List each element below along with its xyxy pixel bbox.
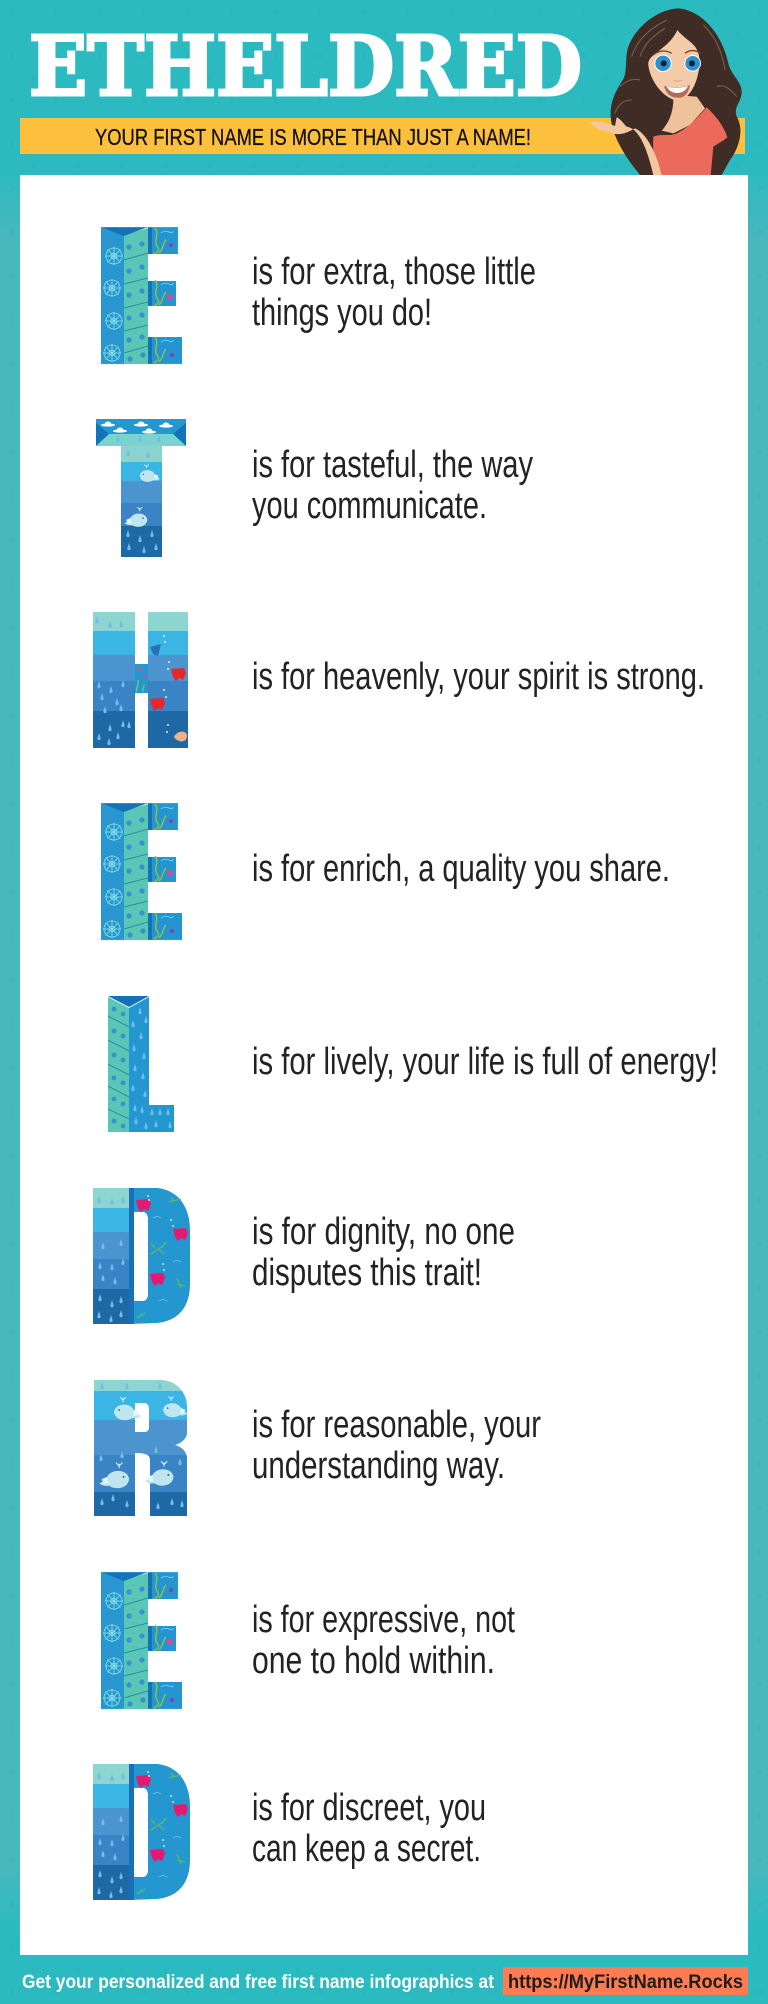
text: D meaning: can keep a secret. [252,1828,481,1870]
letter H [93,612,188,748]
text: R meaning: understanding way. [252,1445,505,1487]
footer call to action: Get your personalized and free first name infographics at [22,1972,495,1993]
text: T meaning: is for tasteful, the way [252,444,533,486]
subtitle banner: YOUR FIRST NAME IS MORE THAN JUST A NAME! [95,124,531,150]
text: D meaning [252,1211,515,1294]
text: D meaning: is for dignity, no one [252,1211,515,1253]
letter L [108,996,174,1132]
text: E meaning: things you do! [252,292,432,334]
subtitle banner [20,118,745,154]
text: E meaning: is for expressive, not [252,1599,515,1641]
text: E meaning [252,251,536,334]
letter E [101,803,182,940]
illustration: woman presenting [590,8,742,175]
text: E meaning: is for extra, those little [252,251,536,293]
text: E meaning [252,1599,515,1682]
text: R meaning: is for reasonable, your [252,1404,541,1446]
text: D meaning: disputes this trait! [252,1252,482,1294]
letter T [96,419,186,557]
letter R [94,1380,187,1516]
letter D [93,1188,190,1324]
title: ETHELDRED [29,19,582,115]
text: D meaning: is for discreet, you [252,1787,486,1829]
text: E meaning: one to hold within. [252,1640,495,1682]
text: T meaning [252,444,533,527]
letter E [101,1572,182,1709]
letter D [93,1764,190,1900]
text: T meaning: you communicate. [252,485,487,527]
footer url badge: https://MyFirstName.Rocks [508,1972,743,1993]
letter E [101,227,182,364]
text: D meaning [252,1787,486,1870]
text: R meaning [252,1404,541,1487]
